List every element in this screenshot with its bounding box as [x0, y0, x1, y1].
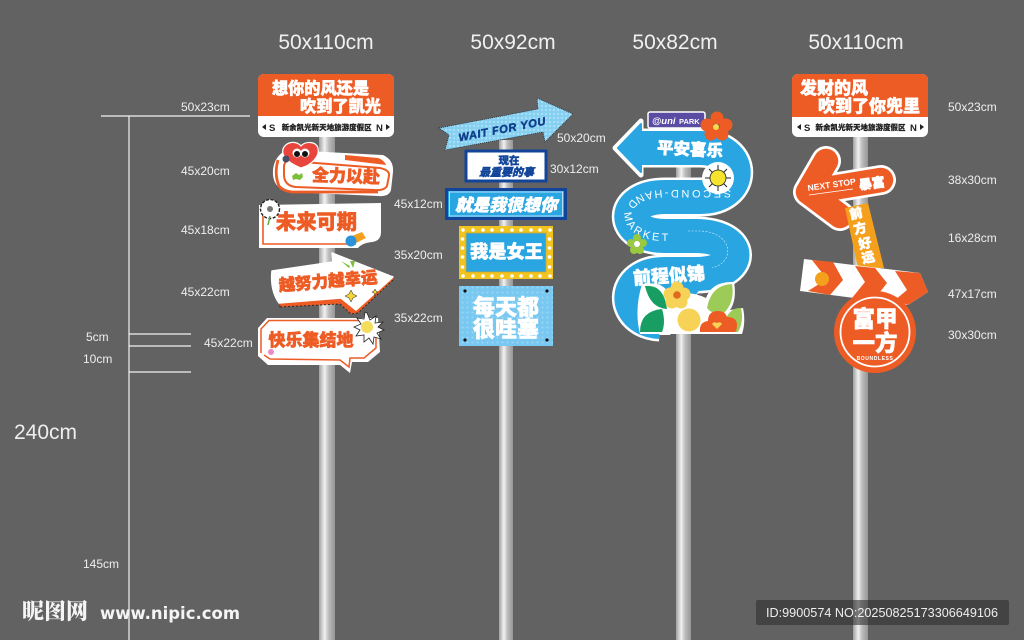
- panel: WAIT FOR YOU arrow: [439, 98, 573, 150]
- size labels column 2: 45x12cm: [394, 197, 443, 211]
- size labels column 4: 16x28cm: [948, 231, 997, 245]
- panel: 未来可期 sign: [259, 200, 381, 248]
- panel: 现在最重要的事: [466, 151, 546, 181]
- text block: [479, 154, 536, 179]
- heading 平安喜乐: 平安喜乐: [657, 137, 724, 161]
- ruler labels: 10cm: [83, 352, 112, 366]
- icon: orange flower: [700, 112, 732, 140]
- pole 4: [853, 130, 868, 640]
- screw holes: [463, 289, 549, 342]
- text block: 运: [860, 249, 876, 266]
- watermark id badge: [756, 600, 1009, 625]
- column size headings: 50x92cm: [470, 31, 556, 54]
- column size headings: [278, 31, 904, 54]
- text block: [473, 295, 539, 342]
- column size headings: 50x110cm: [808, 31, 904, 54]
- column size headings: 50x110cm: [278, 31, 374, 54]
- panel: 快乐集结地 speech sign: [258, 312, 384, 373]
- size labels column 2: [394, 131, 606, 325]
- heading: 越努力越幸运: [278, 267, 379, 295]
- ruler labels: 5cm: [86, 330, 109, 344]
- panel: top sign column 1: [258, 74, 394, 137]
- icon: stars: [345, 289, 378, 302]
- ruler labels: [14, 330, 119, 571]
- pole 2: [499, 140, 513, 640]
- panel: 越努力越幸运 arrow sign: [272, 253, 393, 314]
- panel: 每天都很哇塞: [459, 286, 553, 346]
- icon: green burst: [341, 261, 355, 268]
- icon: smiling sun: [702, 162, 734, 194]
- snake body: [631, 148, 734, 322]
- text block: [852, 306, 898, 362]
- icon: green flower: [627, 234, 647, 254]
- icon: small leaf: [292, 173, 303, 180]
- size labels column 4: 38x30cm: [948, 173, 997, 187]
- size labels column 4: 50x23cm: [948, 100, 997, 114]
- pole 3: [676, 160, 691, 640]
- text block: [848, 205, 876, 266]
- panel: 就是我很想你: [446, 190, 566, 218]
- size labels column 4: 47x17cm: [948, 287, 997, 301]
- direction band: N: [376, 123, 383, 134]
- heading: 我是女王: [470, 241, 543, 262]
- heading: 快乐集结地: [268, 330, 354, 350]
- text block: 一方: [852, 330, 898, 356]
- heading: 未来可期: [276, 211, 357, 234]
- watermark logo: 昵图网: [22, 595, 88, 626]
- ruler labels: 145cm: [83, 557, 119, 571]
- size labels column 1: 45x22cm: [204, 336, 253, 350]
- heading line 1: 发财的风: [800, 78, 868, 98]
- snake outline: [631, 148, 734, 322]
- direction band: [797, 122, 924, 134]
- badge: uni park: [648, 112, 705, 128]
- icon: sun: [354, 312, 384, 344]
- label NEXT STOP: NEXT STOP: [807, 176, 857, 193]
- direction band: 新余凯光新天地旅游度假区: [816, 122, 906, 132]
- size labels column 2: 35x20cm: [394, 248, 443, 262]
- curved text: SECOND-HAND MARKET: [624, 190, 730, 241]
- icon: heart mascot: [282, 142, 318, 168]
- height ruler: [101, 116, 250, 640]
- size labels column 1: 50x23cm: [181, 100, 230, 114]
- ruler labels: 240cm: [14, 421, 77, 444]
- icon: daisy: [260, 200, 280, 225]
- marquee lights: [461, 228, 552, 278]
- text block: 方: [852, 220, 868, 237]
- text block: 每天都: [473, 295, 539, 320]
- watermark id badge: ID:9900574 NO:20250825173306649106: [766, 606, 998, 620]
- icon: blue comet: [346, 232, 366, 246]
- heading line 2: 吹到了你兜里: [818, 96, 920, 116]
- badge: uni park: @uni: [652, 116, 676, 127]
- size labels column 1: [181, 100, 253, 350]
- icon: pink flower: [268, 349, 274, 355]
- direction band: S: [269, 123, 275, 134]
- heading: WAIT FOR YOU: [458, 116, 547, 144]
- text block: BOUNDLESS: [857, 356, 893, 362]
- text block: 很哇塞: [473, 317, 539, 342]
- text block: 最重要的事: [479, 166, 536, 179]
- panel: chevron board: [800, 259, 928, 305]
- text block: 好: [857, 235, 873, 252]
- size labels column 1: 45x20cm: [181, 164, 230, 178]
- text block: 前: [848, 205, 864, 222]
- pole 1: [319, 130, 335, 640]
- heading 前程似锦: 前程似锦: [632, 263, 706, 288]
- size labels column 4: 30x30cm: [948, 328, 997, 342]
- panel: 前方好运 banner: [845, 203, 884, 268]
- heading: 就是我很想你: [455, 196, 560, 215]
- flower cluster: [637, 282, 744, 334]
- heading line 2: 吹到了凯光: [300, 97, 381, 116]
- underline: [809, 189, 853, 195]
- badge: uni park: PARK: [679, 117, 700, 126]
- watermark logo: [22, 595, 240, 626]
- size labels column 2: 35x22cm: [394, 311, 443, 325]
- label 暴富: 暴富: [858, 174, 886, 193]
- panel: 富甲一方 round sign: [834, 291, 916, 373]
- heading: 全力以赴: [312, 165, 380, 187]
- direction band: 新余凯光新天地旅游度假区: [282, 122, 372, 132]
- panel: 我是女王 marquee sign: [459, 226, 553, 279]
- yellow dot: [815, 272, 829, 286]
- direction band: N: [910, 123, 917, 134]
- panel: next stop chevron arrow: [807, 161, 886, 216]
- panel: serpentine sign: [612, 111, 754, 342]
- size labels column 2: 30x12cm: [550, 162, 599, 176]
- size labels column 1: 45x18cm: [181, 223, 230, 237]
- size labels column 1: 45x22cm: [181, 285, 230, 299]
- size labels column 4: [948, 100, 997, 342]
- orange chevrons: [808, 260, 928, 305]
- heading line 1: 想你的风还是: [272, 79, 369, 98]
- size labels column 2: 50x20cm: [557, 131, 606, 145]
- text block: 富甲: [852, 306, 898, 332]
- direction band: [262, 122, 390, 134]
- direction band: S: [804, 123, 810, 134]
- text block: 现在: [498, 154, 520, 167]
- dashed line: [688, 231, 728, 268]
- panel: top sign column 4: [792, 74, 928, 137]
- column size headings: 50x82cm: [632, 31, 718, 54]
- panel: 全力以赴 sign: [273, 142, 393, 196]
- watermark logo: www.nipic.com: [100, 604, 240, 624]
